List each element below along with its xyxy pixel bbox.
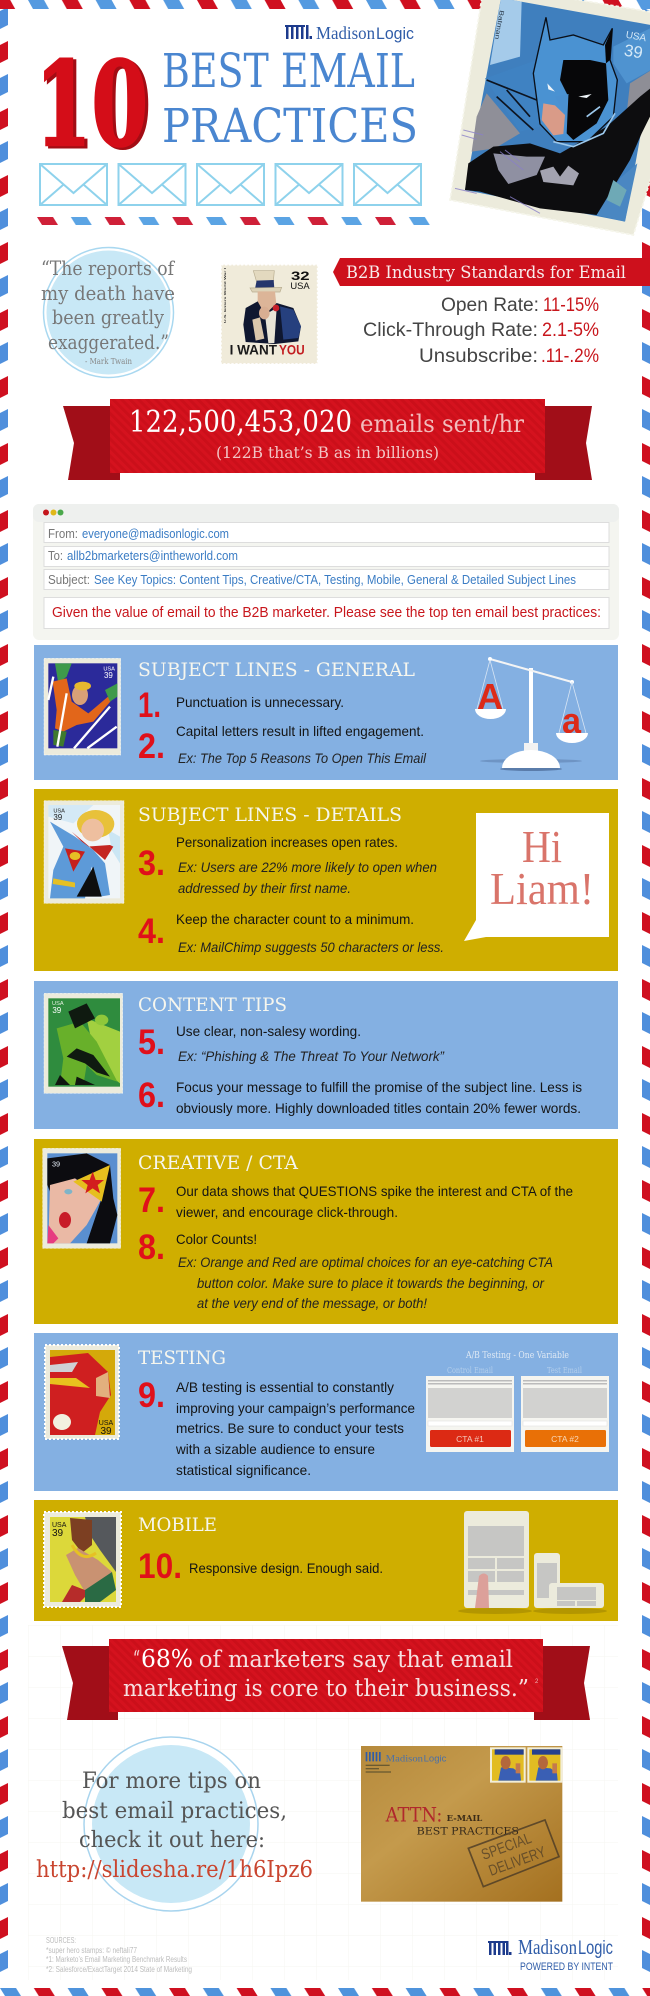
tip 6: obviously more. Highly downloaded titles contain 20% fewer words.	[176, 1100, 581, 1116]
sources: *super hero stamps: © neftali77	[46, 1946, 137, 1955]
tablet	[464, 1511, 529, 1608]
tip 2: 2.	[138, 727, 165, 766]
Supergirl stamp	[44, 801, 124, 903]
title number 10: 10	[38, 39, 151, 175]
tip 1: Punctuation is unnecessary.	[176, 694, 344, 710]
Mark Twain quote circle: my death have	[41, 282, 175, 305]
tip 4: Ex: MailChimp suggests 50 characters or less.	[178, 939, 444, 955]
B2B rates: .11-.2%	[541, 346, 599, 367]
Uncle Sam stamp: U.S. Enters World War I	[223, 268, 227, 323]
tip 10: Responsive design. Enough said.	[189, 1560, 383, 1576]
A/B testing diagram: A/B Testing - One Variable	[465, 1351, 569, 1361]
tip 5	[138, 1023, 445, 1064]
footer logo: POWERED BY INTENT	[520, 1961, 613, 1973]
heading: TESTING	[138, 1347, 226, 1369]
tip 2: Capital letters result in lifted engagement.	[176, 723, 424, 739]
Mark Twain quote circle: - Mark Twain	[85, 357, 132, 366]
tip 7: viewer, and encourage click-through.	[176, 1204, 398, 1220]
Supergirl stamp: USA	[53, 808, 65, 814]
call to action circle: For more tips on	[82, 1769, 261, 1794]
tip 6: 6.	[138, 1076, 165, 1115]
icon: balance scale: A	[477, 676, 503, 717]
tip 3: addressed by their first name.	[178, 880, 351, 896]
row of envelope icons	[40, 164, 421, 205]
special delivery rubber stamp: DELIVERY	[487, 1843, 548, 1880]
red banner: 68 percent quote: 2	[535, 1679, 539, 1685]
from field: everyone@madisonlogic.com	[82, 526, 229, 541]
email window panel	[33, 504, 619, 640]
section: subject lines details	[34, 789, 618, 971]
phone portrait	[534, 1553, 560, 1608]
to field: allb2bmarketers@intheworld.com	[67, 548, 238, 563]
Flash stamp: 39	[100, 1426, 112, 1437]
tip 2: Ex: The Top 5 Reasons To Open This Email	[178, 750, 427, 766]
control email	[426, 1376, 514, 1452]
subject field	[44, 570, 609, 590]
red banner: emails sent: 122,500,453,020	[129, 405, 352, 440]
call to action circle: check it out here:	[79, 1828, 265, 1853]
envelope logo: Madison	[386, 1754, 423, 1765]
red banner: 68 percent quote: of marketers say that email	[199, 1647, 513, 1673]
address text	[385, 1804, 519, 1837]
section: creative CTA	[34, 1139, 618, 1324]
B2B rates: Unsubscribe:	[419, 346, 538, 367]
control email: CTA #1	[456, 1434, 484, 1444]
tip 6	[138, 1076, 582, 1116]
title text	[162, 44, 418, 154]
tip 9: metrics. Be sure to conduct your tests	[176, 1420, 404, 1436]
address text: E-MAIL	[447, 1814, 482, 1824]
finger	[475, 1574, 489, 1608]
Uncle Sam stamp: 32	[291, 269, 310, 283]
A/B testing diagram: Control Email	[447, 1366, 493, 1375]
red banner: 68 percent quote: 68%	[141, 1645, 193, 1673]
tip 9: 9.	[138, 1376, 165, 1415]
tip 10: 10.	[138, 1547, 182, 1586]
section: subject lines general	[34, 645, 618, 780]
Wonder Woman stamp: 39	[52, 1160, 60, 1169]
speech bubble: Hi Liam	[464, 813, 609, 941]
B2B rates: Open Rate:	[441, 295, 539, 316]
speech bubble: Hi Liam: Hi	[522, 821, 562, 872]
tip 4: Keep the character count to a minimum.	[176, 911, 414, 927]
tip 3: 3.	[138, 844, 165, 883]
Aquaman stamp: USA	[103, 667, 115, 673]
envelope logo: Logic	[424, 1754, 447, 1764]
heading: SUBJECT LINES - DETAILS	[138, 804, 402, 826]
to field: To:	[48, 548, 63, 563]
subject field: Subject:	[48, 572, 90, 587]
B2B rates: Click-Through Rate:	[363, 320, 538, 341]
tip 5: Use clear, non-salesy wording.	[176, 1023, 361, 1039]
tip 8: Color Counts!	[176, 1231, 257, 1247]
speech bubble: Hi Liam: Liam!	[490, 863, 594, 914]
Green Lantern stamp	[44, 993, 123, 1093]
intro message: Given the value of email to the B2B marketer. Please see the top ten email best practices:	[52, 605, 601, 621]
test email	[521, 1376, 609, 1452]
section: content tips	[34, 981, 618, 1129]
phone landscape	[549, 1583, 604, 1608]
Supergirl stamp: 39	[53, 813, 63, 822]
heading: CREATIVE / CTA	[138, 1152, 298, 1174]
Uncle Sam stamp: USA	[290, 281, 310, 291]
call to action circle	[36, 1737, 313, 1911]
Mark Twain quote circle: exaggerated.”	[48, 331, 169, 354]
tip 9: A/B testing is essential to constantly	[176, 1379, 394, 1395]
tip 8: 8.	[138, 1228, 165, 1267]
address text: ATTN:	[385, 1804, 442, 1827]
tip 4: 4.	[138, 912, 165, 951]
B2B rates	[363, 295, 599, 367]
Batman stamp: USA	[625, 30, 647, 44]
special delivery rubber stamp	[468, 1820, 559, 1887]
icon: balance scale	[475, 657, 588, 771]
Mark Twain quote circle	[41, 248, 176, 378]
tip 1	[138, 686, 344, 725]
tip 5: 5.	[138, 1023, 165, 1062]
title text: BEST EMAIL	[162, 44, 415, 99]
header logo	[285, 23, 414, 43]
airmail divider under title	[37, 217, 430, 225]
Batman stamp: Batman	[493, 10, 505, 40]
tip 7	[138, 1181, 573, 1220]
test email: CTA #2	[551, 1434, 579, 1444]
heading: CONTENT TIPS	[138, 994, 287, 1016]
Uncle Sam stamp: I WANT	[230, 342, 277, 358]
red banner: emails sent: (122B that’s B as in billions)	[216, 443, 439, 462]
title number 10: 10	[35, 37, 148, 173]
icon: responsive devices	[458, 1511, 607, 1614]
special delivery rubber stamp: SPECIAL	[479, 1830, 534, 1864]
heading: SUBJECT LINES - GENERAL	[138, 659, 415, 681]
red banner: emails sent	[63, 399, 592, 480]
B2B rates: 2.1-5%	[542, 320, 599, 341]
section: mobile	[34, 1500, 618, 1621]
tip 4	[138, 911, 444, 955]
tip 7: 7.	[138, 1181, 165, 1220]
tip 9	[138, 1376, 415, 1478]
call to action circle: best email practices,	[62, 1799, 287, 1824]
Uncle Sam stamp: YOU	[279, 342, 305, 358]
tip 8	[138, 1228, 553, 1311]
header logo: Madison	[316, 23, 375, 43]
title text: PRACTICES	[162, 99, 418, 154]
red banner: 68 percent quote	[62, 1639, 590, 1720]
Hawkman stamp: USA	[52, 1522, 67, 1529]
address text: BEST PRACTICES	[417, 1825, 519, 1837]
tip 7: Our data shows that QUESTIONS spike the interest and CTA of the	[176, 1183, 573, 1199]
sources: *1: Marketo’s Email Marketing Benchmark Results	[46, 1955, 187, 1964]
tip 5: Ex: “Phishing & The Threat To Your Network”	[178, 1048, 445, 1064]
sources: SOURCES:	[46, 1936, 76, 1945]
tip 8: at the very end of the message, or both!	[197, 1295, 427, 1311]
footer logo: Logic	[578, 1938, 613, 1959]
Hawkman stamp	[44, 1512, 121, 1607]
tip 6: Focus your message to fulfill the promise of the subject line. Less is	[176, 1079, 582, 1095]
tip 3	[138, 834, 437, 896]
footer logo	[488, 1935, 613, 1973]
Batman stamp: 39	[623, 41, 644, 62]
red banner: 68 percent quote: “	[133, 1647, 140, 1673]
tip 2	[138, 723, 427, 766]
Flash stamp	[45, 1345, 119, 1439]
tip 10	[138, 1547, 383, 1586]
Hawkman stamp: 39	[52, 1528, 64, 1539]
intro message	[44, 598, 609, 628]
tip 8: Ex: Orange and Red are optimal choices for an eye-catching CTA	[178, 1254, 553, 1270]
Aquaman stamp	[44, 658, 121, 755]
call to action circle: http://slidesha.re/1h6Ipz6	[36, 1857, 313, 1883]
Green Lantern stamp: USA	[52, 1001, 64, 1007]
footer logo: Madison	[518, 1935, 577, 1959]
to field	[44, 546, 609, 566]
icon: balance scale: a	[562, 700, 582, 741]
Wonder Woman stamp	[43, 1148, 121, 1248]
B2B standards tag: B2B Industry Standards for Email	[346, 263, 626, 283]
tip 9: improving your campaign’s performance	[176, 1400, 415, 1416]
kraft envelope	[361, 1746, 562, 1902]
window dots	[43, 510, 64, 516]
tip 8: button color. Make sure to place it towards the beginning, or	[197, 1275, 545, 1291]
Green Lantern stamp: 39	[52, 1006, 62, 1015]
Mark Twain quote circle: “The reports of	[41, 257, 176, 280]
B2B rates: 11-15%	[543, 295, 599, 316]
from field: From:	[48, 526, 78, 541]
header logo: Logic	[376, 24, 414, 43]
Batman stamp	[450, 0, 650, 235]
tip 9: with a sizable audience to ensure	[175, 1441, 375, 1457]
A/B testing diagram	[426, 1351, 609, 1452]
Aquaman stamp: 39	[104, 671, 113, 680]
tip 9: statistical significance.	[176, 1462, 311, 1478]
A/B testing diagram: Test Email	[547, 1366, 582, 1375]
Rosie stamps	[490, 1747, 562, 1783]
sources	[46, 1936, 192, 1974]
subject field: See Key Topics: Content Tips, Creative/CTA, Testing, Mobile, General & Detailed Subject Lines	[94, 572, 576, 587]
envelope logo	[366, 1752, 447, 1773]
Mark Twain quote circle: been greatly	[52, 306, 164, 329]
section: testing	[34, 1333, 618, 1491]
red banner: emails sent: emails sent/hr	[360, 410, 524, 438]
from field	[44, 522, 609, 542]
B2B standards tag	[333, 258, 650, 286]
tip 3: Ex: Users are 22% more likely to open when	[178, 859, 437, 875]
Flash stamp: USA	[99, 1420, 114, 1427]
red banner: 68 percent quote: marketing is core to their business.”	[123, 1676, 529, 1702]
Uncle Sam stamp	[221, 265, 318, 364]
tip 1: 1.	[138, 686, 161, 725]
heading: MOBILE	[138, 1514, 217, 1536]
sources: *2: Salesforce/ExactTarget 2014 State of Marketing	[46, 1965, 192, 1974]
tip 3: Personalization increases open rates.	[176, 834, 398, 850]
